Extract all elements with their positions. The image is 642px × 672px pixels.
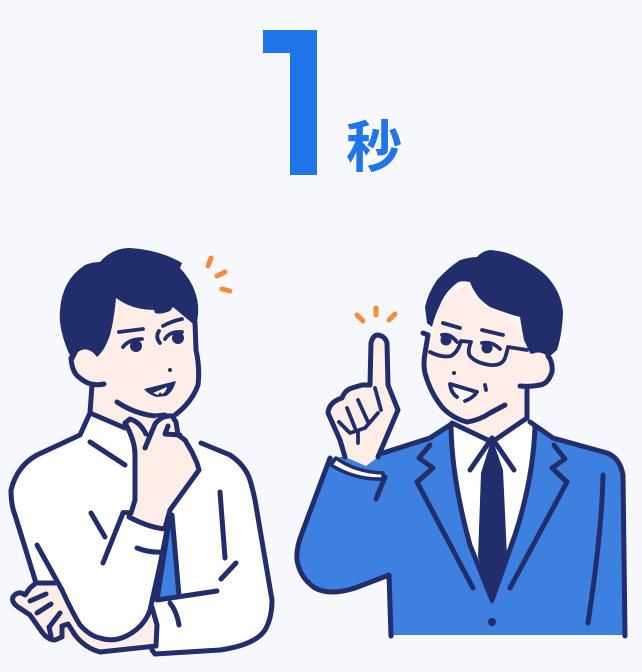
illustration: man in suit pointing [297, 250, 625, 636]
face and neck [72, 296, 199, 428]
pointing hand [328, 335, 398, 466]
face outline [423, 333, 552, 422]
hair [425, 250, 563, 357]
glasses [430, 341, 527, 365]
blue tie [157, 515, 179, 600]
shirt outline [11, 413, 272, 654]
illustration: thinking man [11, 248, 272, 654]
jacket button [488, 618, 496, 626]
eyebrows, eyes, nose and mouth [440, 323, 503, 401]
unit: seconds: 秒 [346, 103, 402, 184]
jacket outline [297, 418, 625, 636]
face and neck [424, 280, 552, 442]
emphasis marks [208, 258, 230, 291]
eyebrows, eyes, nose and mouth [119, 319, 184, 397]
navy tie [478, 438, 507, 605]
hair [60, 248, 198, 360]
sparkle marks [357, 308, 395, 321]
face outline [71, 322, 199, 416]
chin hand [123, 414, 199, 530]
white shirt [11, 413, 272, 654]
numeral 1 [263, 30, 317, 175]
blue jacket [297, 418, 625, 635]
heading: 1 second [263, 30, 401, 175]
white shirt [451, 418, 535, 600]
resting hand outline [13, 583, 157, 652]
resting hand and forearm [12, 583, 157, 652]
shirt cuff [331, 458, 383, 479]
